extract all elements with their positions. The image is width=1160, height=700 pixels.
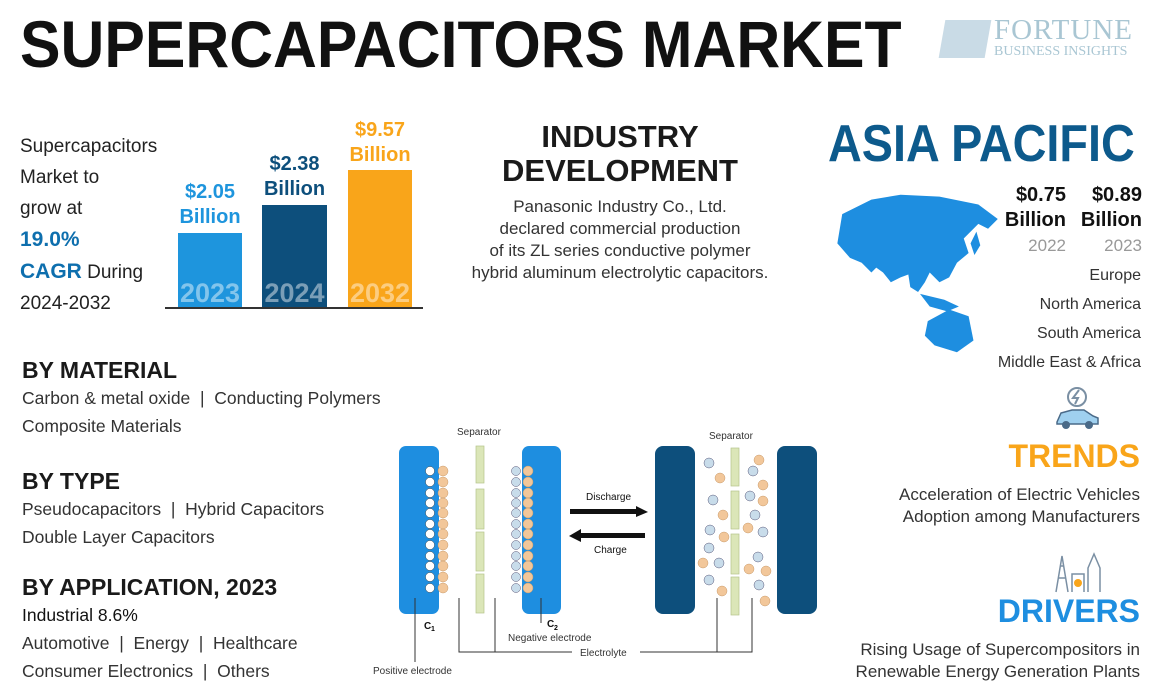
by application: BY APPLICATION, 2023: [22, 574, 277, 600]
industry development: DEVELOPMENT: [502, 153, 738, 188]
bar chart: 2024: [264, 278, 325, 308]
bar chart: Billion: [264, 178, 325, 200]
by type: [22, 468, 324, 547]
text: $0.75: [1016, 184, 1066, 206]
bar 2032: [348, 170, 412, 307]
bar chart: 2023: [180, 278, 240, 308]
trends: Adoption among Manufacturers: [903, 507, 1140, 526]
industry development: hybrid aluminum electrolytic capacitors.: [472, 263, 768, 282]
bar chart: Billion: [349, 144, 411, 166]
by type: BY TYPE: [22, 468, 120, 494]
bar chart: $2.38: [269, 153, 320, 175]
trends: [899, 438, 1140, 526]
region list: North America: [1040, 296, 1141, 313]
diagram: supercapacitor: 2: [554, 625, 558, 632]
drivers: [856, 593, 1140, 681]
heading: asia pacific: ASIA PACIFIC: [828, 115, 1135, 173]
logo: FORTUNE: [994, 14, 1133, 46]
icon: renewable plant: [1055, 552, 1101, 592]
stats: asia pacific: [1005, 184, 1142, 255]
trends: Acceleration of Electric Vehicles: [899, 485, 1140, 504]
map: asia pacific: [837, 194, 998, 352]
diagram: supercapacitor: C: [424, 621, 431, 632]
diagram: supercapacitor: Separator: [457, 427, 502, 438]
by application: [22, 574, 298, 681]
icon: electric vehicle: [1056, 387, 1099, 429]
industry development: of its ZL series conductive polymer: [489, 241, 751, 260]
by application: Consumer Electronics | Others: [22, 661, 270, 681]
text: growth summary: CAGR During: [20, 260, 143, 283]
diagram: supercapacitor: [373, 427, 817, 677]
region list: Middle East & Africa: [998, 354, 1141, 371]
bar 2024: [262, 205, 327, 307]
bar chart: $9.57: [355, 119, 405, 141]
region list: Europe: [1089, 267, 1141, 284]
region list: [998, 267, 1142, 371]
region list: South America: [1037, 325, 1141, 342]
bar 2023: [178, 233, 242, 307]
industry development: [472, 119, 768, 282]
industry development: Panasonic Industry Co., Ltd.: [513, 197, 727, 216]
logo: BUSINESS INSIGHTS: [994, 44, 1127, 59]
by material: [22, 357, 381, 436]
text: $0.89: [1092, 184, 1142, 206]
text: Billion: [1005, 209, 1066, 231]
by type: Pseudocapacitors | Hybrid Capacitors: [22, 499, 324, 519]
by material: BY MATERIAL: [22, 357, 177, 383]
bar chart: Billion: [179, 206, 241, 228]
by application: Automotive | Energy | Healthcare: [22, 633, 298, 653]
bar chart: 2032: [350, 278, 410, 308]
by material: Composite Materials: [22, 416, 182, 436]
diagram: supercapacitor: Electrolyte: [580, 648, 627, 659]
drivers: Rising Usage of Supercompositors in: [860, 640, 1140, 659]
diagram: supercapacitor: C: [547, 619, 554, 630]
drivers: DRIVERS: [998, 593, 1140, 629]
diagram: supercapacitor: Separator: [709, 431, 754, 442]
diagram: supercapacitor: Charge: [594, 545, 627, 556]
text: growth summary: Market to: [20, 167, 99, 188]
text: growth summary: Supercapacitors: [20, 136, 157, 157]
trends: TRENDS: [1008, 438, 1140, 474]
text: 2023: [1104, 236, 1142, 255]
text: growth summary: [20, 136, 157, 314]
title: SUPERCAPACITORS MARKET: [20, 7, 902, 81]
text: 2022: [1028, 236, 1066, 255]
bar chart: $2.05: [185, 181, 235, 203]
diagram: supercapacitor: Negative electrode: [508, 633, 592, 644]
text: growth summary: 19.0%: [20, 228, 80, 251]
drivers: Renewable Energy Generation Plants: [856, 662, 1140, 681]
bar chart: [165, 119, 423, 309]
icon: logo mark: [939, 20, 991, 58]
diagram: supercapacitor: Positive electrode: [373, 666, 452, 677]
text: growth summary: grow at: [20, 198, 82, 219]
diagram: supercapacitor: Discharge: [586, 492, 631, 503]
text: Billion: [1081, 209, 1142, 231]
by type: Double Layer Capacitors: [22, 527, 215, 547]
industry development: declared commercial production: [500, 219, 740, 238]
logo: [938, 14, 1133, 59]
diagram: supercapacitor: 1: [431, 626, 435, 633]
industry development: INDUSTRY: [541, 119, 699, 154]
by material: Carbon & metal oxide | Conducting Polymers: [22, 388, 381, 408]
text: growth summary: 2024-2032: [20, 293, 111, 314]
by application: Industrial 8.6%: [22, 605, 138, 625]
